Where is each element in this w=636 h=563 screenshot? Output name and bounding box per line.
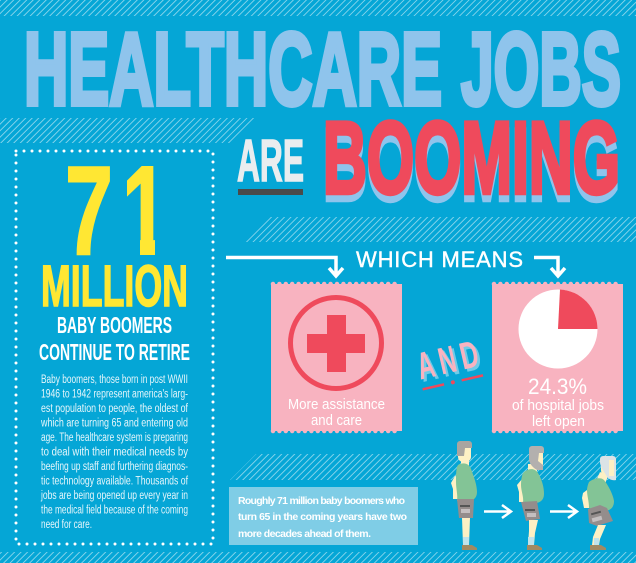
card label [512, 398, 604, 430]
title: are: ARE [237, 128, 304, 194]
body text: 1946 to 1942 represent america's larg- [41, 388, 188, 400]
label: and: D [458, 336, 485, 381]
title: are [237, 128, 304, 195]
pie chart: 24.3% [518, 290, 598, 368]
card: hospital jobs left open [492, 284, 623, 431]
card label: and care [311, 413, 362, 429]
arrow: second progression [550, 505, 577, 518]
callout [229, 487, 418, 545]
icon: medical cross [290, 298, 382, 388]
stat: 71: 7 [65, 140, 113, 281]
body text: beefing up staff and furthering diagnos- [41, 461, 188, 473]
label: and: A [416, 346, 442, 391]
card label [288, 397, 385, 429]
label: and: D [456, 333, 483, 378]
callout: turn 65 in the coming years have two [238, 511, 407, 523]
body text: jobs are being opened up every year in [40, 490, 188, 502]
stat: 24.3%: 24.3% [528, 374, 587, 399]
label: and: N [434, 339, 460, 383]
arrow: first progression [484, 505, 511, 518]
card label: More assistance [288, 397, 385, 413]
figure: slightly stooped man [517, 446, 544, 550]
figure: upright man [451, 441, 477, 550]
stat: million: MILLION [41, 254, 188, 319]
body text: to deal with their medical needs by [41, 446, 188, 458]
label: and: N [437, 341, 463, 386]
heading: which means: WHICH MEANS [356, 247, 523, 272]
body text: Baby boomers, those born in post WWII [41, 374, 188, 386]
body text: the medical field because of the coming [41, 504, 188, 516]
figure: hunched man [582, 456, 616, 550]
stat: 71: 1 [122, 140, 168, 281]
card: more assistance and care [271, 284, 402, 431]
panel: 71 million [16, 140, 213, 544]
arrow: to hospital jobs card [534, 258, 565, 276]
body text: which are turning 65 and entering old [40, 418, 188, 430]
card label: of hospital jobs [512, 398, 604, 414]
body text: age. The healthcare system is preparing [41, 432, 188, 444]
label: and [413, 333, 485, 391]
body text: est population to people, the oldest of [41, 403, 189, 415]
body text: need for care. [41, 519, 92, 531]
body text [40, 374, 189, 531]
arrow: to assistance card [226, 258, 343, 276]
callout: more decades ahead of them. [238, 528, 371, 540]
body text: tic technology available. Thousands of [41, 476, 189, 488]
heading: baby boomers: BABY BOOMERS [57, 312, 172, 338]
callout: Roughly 71 million baby boomers who [238, 495, 405, 507]
stat: 71 [65, 140, 173, 281]
label: and: A [413, 344, 439, 388]
card label: left open [532, 414, 585, 430]
heading: continue to retire: CONTINUE TO RETIRE [39, 339, 190, 365]
